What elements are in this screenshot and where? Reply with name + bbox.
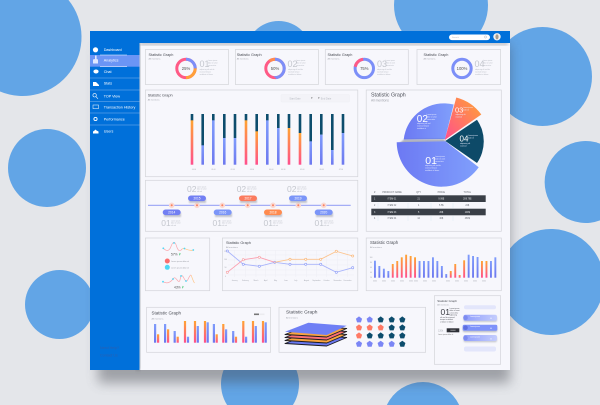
pie labels: Lorem ipsum bbox=[463, 106, 473, 109]
product table: # bbox=[374, 191, 376, 194]
blue series bbox=[226, 250, 354, 273]
month labels: August bbox=[304, 279, 310, 282]
donut card 4: 100% bbox=[457, 66, 468, 71]
donut card 3: Statistic Graph bbox=[328, 53, 352, 57]
pie labels: dolor sit amet bbox=[426, 116, 437, 118]
product table: ITEM 04 bbox=[388, 218, 397, 220]
donut card 1: Lorem ipsum bbox=[208, 60, 218, 62]
menu labels: TOP View bbox=[104, 94, 120, 98]
dashboard window bbox=[90, 31, 510, 370]
value badge bbox=[438, 328, 459, 336]
grouped bar card: All mentions bbox=[152, 318, 164, 320]
product table: TOTAL bbox=[464, 191, 472, 194]
time labels: 04:00 bbox=[269, 169, 273, 171]
product table: QTY bbox=[416, 191, 422, 194]
timeline captions: dolor sit amet bbox=[247, 188, 257, 191]
time labels: 01:00 bbox=[211, 169, 216, 171]
donut card 2: All mentions bbox=[237, 58, 250, 61]
window shadow bbox=[98, 45, 510, 383]
list card: elit sed do eiusmod bbox=[440, 316, 455, 319]
column labels: 0000 bbox=[382, 280, 386, 282]
time labels: 07:00 bbox=[339, 169, 343, 171]
layers and pictogram card: All mentions bbox=[286, 316, 299, 320]
timeline card bbox=[145, 180, 358, 231]
blue bar segments bbox=[201, 120, 344, 165]
timeline captions: dolor sit amet bbox=[171, 222, 181, 225]
y axis labels bbox=[370, 257, 372, 279]
date filter: End Date bbox=[321, 98, 332, 100]
y axis labels: 60 bbox=[370, 267, 372, 269]
menu labels: Dashboard bbox=[104, 48, 122, 52]
donut card 3: dolor sit amet bbox=[386, 62, 396, 64]
timeline captions: elit sed bbox=[247, 190, 252, 193]
time labels: 05:00 bbox=[300, 169, 304, 171]
menu labels: Chat bbox=[104, 70, 111, 74]
column labels bbox=[373, 280, 486, 282]
time labels: 03:00 bbox=[250, 169, 254, 171]
year pills: 2016 bbox=[219, 210, 226, 214]
product table: 480$ bbox=[465, 218, 471, 220]
date filter: Start Date bbox=[289, 98, 301, 100]
list card: tempor incididunt bbox=[440, 318, 453, 321]
timeline captions: elit sed bbox=[273, 224, 278, 227]
product table bbox=[371, 191, 486, 221]
pie labels: eiusmod tempor bbox=[417, 124, 430, 128]
pie labels: incididunt ut labore bbox=[425, 169, 439, 172]
year pills bbox=[163, 196, 333, 215]
layered stack bbox=[285, 323, 347, 346]
top bar bbox=[90, 31, 510, 43]
y axis labels: 20 bbox=[370, 277, 372, 279]
column chart card: All mentions bbox=[370, 246, 383, 249]
product table: 9.99$ bbox=[438, 199, 445, 201]
column labels: 0000 bbox=[473, 280, 477, 282]
time labels: 00:00 bbox=[192, 169, 196, 171]
y axis labels: 120 bbox=[224, 251, 227, 253]
pie labels: dolor sit bbox=[468, 136, 474, 140]
product table: PRODUCT NAME bbox=[382, 191, 402, 194]
grouped bar card bbox=[147, 307, 271, 352]
timeline numbers: 01 bbox=[264, 218, 273, 228]
pie labels: adipiscing elit sed bbox=[417, 122, 430, 125]
column labels: 0000 bbox=[373, 280, 377, 282]
y axis labels: 100 bbox=[224, 259, 227, 261]
donut card 2: 02 bbox=[288, 59, 298, 69]
timeline captions: elit sed bbox=[324, 224, 329, 227]
column labels: 0000 bbox=[446, 280, 450, 282]
pie slice 04 bbox=[445, 120, 484, 163]
column chart card: Statistic Graph bbox=[370, 240, 399, 245]
donut 25% bbox=[177, 59, 195, 78]
pie labels: adipiscing elit bbox=[460, 142, 471, 145]
column labels: 0000 bbox=[482, 280, 486, 282]
timeline numbers: 01 bbox=[314, 218, 324, 228]
timeline captions: dolor sit amet bbox=[197, 188, 207, 191]
month labels: January bbox=[232, 279, 238, 282]
dark bar segments bbox=[191, 114, 344, 150]
column labels: 0000 bbox=[423, 280, 427, 282]
timeline markers bbox=[169, 202, 327, 208]
pie labels: Lorem ipsum bbox=[426, 113, 437, 116]
column labels: 0000 bbox=[432, 280, 436, 282]
list card: Statistic Graph bbox=[437, 299, 457, 303]
column labels: 0000 bbox=[414, 280, 418, 282]
pie labels: 02 bbox=[417, 114, 428, 125]
donut card 2: consectetur bbox=[296, 64, 305, 67]
donut 50% bbox=[266, 59, 284, 78]
product table: 209.79$ bbox=[463, 199, 472, 201]
date filter bbox=[281, 94, 350, 102]
timeline numbers: 02 bbox=[237, 184, 246, 194]
year pills: 2015 bbox=[193, 196, 201, 200]
top bar shadow bbox=[140, 42, 508, 45]
pie labels: eiusmod bbox=[460, 146, 466, 148]
time labels bbox=[192, 169, 343, 171]
sparkline card bbox=[145, 238, 210, 291]
pie labels: 01 bbox=[425, 155, 437, 167]
timeline captions: Lorem ipsum bbox=[222, 220, 232, 222]
menu labels: Users bbox=[104, 130, 113, 134]
timeline captions: dolor sit amet bbox=[297, 188, 307, 191]
timeline captions: Lorem ipsum bbox=[273, 220, 283, 222]
help links: Need Help? bbox=[100, 346, 119, 350]
line chart card: All mentions bbox=[226, 246, 239, 249]
stacked bar chart card bbox=[145, 90, 358, 177]
timeline captions: Lorem ipsum bbox=[297, 186, 307, 188]
search box: Search bbox=[452, 36, 460, 39]
donut card 4: All mentions bbox=[424, 58, 436, 61]
pie labels: 03 bbox=[455, 106, 463, 115]
donut card 1: consectetur bbox=[208, 64, 217, 67]
month labels: May bbox=[274, 280, 277, 282]
pie labels: Lorem ipsum bbox=[435, 155, 445, 158]
year pills: 2019 bbox=[294, 196, 302, 200]
y axis labels: 80 bbox=[370, 262, 372, 264]
menu labels: Stats bbox=[104, 82, 112, 86]
orange columns bbox=[392, 255, 487, 278]
menu labels: Performance bbox=[104, 117, 125, 121]
month labels: November bbox=[334, 279, 342, 282]
timeline captions: elit sed bbox=[197, 190, 202, 193]
donut card 4: incididunt ut labore bbox=[475, 73, 488, 76]
year pills: 2018 bbox=[269, 210, 277, 214]
donut card 2: eiusmod tempor bbox=[288, 70, 300, 74]
legend: Lorem ipsum dolor sit bbox=[171, 260, 190, 263]
product table: 4 bbox=[374, 218, 376, 220]
menu icons bbox=[93, 47, 99, 134]
product table: 40$ bbox=[439, 218, 444, 220]
bottom sparkline bbox=[162, 275, 194, 283]
list pills bbox=[463, 305, 497, 352]
donut card 1 bbox=[145, 50, 228, 84]
list card: Lorem ipsum bbox=[450, 307, 460, 310]
donut card 4: dolor sit amet bbox=[483, 62, 493, 64]
value badge: 120k bbox=[438, 330, 444, 333]
list card: dolor sit amet bbox=[450, 309, 460, 312]
donut card 4: Statistic Graph bbox=[424, 53, 448, 57]
pie slice 01 bbox=[397, 141, 479, 187]
y axis labels: 50 bbox=[225, 267, 226, 269]
donut card 4 bbox=[417, 50, 501, 84]
y axis labels bbox=[224, 251, 227, 278]
active menu highlight bbox=[90, 55, 140, 67]
help links: Contact Us bbox=[100, 354, 118, 358]
pie and table card: All mentions bbox=[371, 99, 389, 103]
pie labels: consectetur bbox=[426, 118, 436, 121]
month labels: December bbox=[344, 279, 352, 282]
time labels: 06:00 bbox=[320, 169, 324, 171]
product table: ITEM 02 bbox=[388, 205, 397, 207]
orange bars bbox=[157, 321, 264, 343]
timeline axis bbox=[148, 205, 351, 206]
product table: 12 bbox=[417, 218, 421, 220]
pie and table card bbox=[366, 90, 501, 231]
timeline captions: Lorem ipsum bbox=[171, 220, 181, 222]
pie labels: eiusmod tempor bbox=[425, 166, 438, 170]
pie labels: consectetur bbox=[435, 160, 444, 163]
pie labels bbox=[417, 106, 478, 172]
y axis labels: 40 bbox=[370, 272, 372, 274]
donut card 2: Lorem ipsum bbox=[296, 60, 306, 62]
timeline captions: dolor sit amet bbox=[273, 222, 283, 225]
pie labels: incididunt ut bbox=[417, 127, 427, 130]
menu labels bbox=[104, 48, 135, 134]
timeline captions: elit sed bbox=[171, 224, 176, 227]
pie labels: dolor sit amet bbox=[435, 158, 446, 160]
legend: Lorem ipsum dolor sit bbox=[171, 266, 190, 269]
donut card 3: adipiscing elit sed do bbox=[377, 68, 392, 71]
time labels: 02:00 bbox=[231, 169, 235, 171]
donut card 1: 25% bbox=[182, 66, 190, 71]
time labels: 04:30 bbox=[281, 169, 285, 171]
donut card 3: incididunt ut labore bbox=[377, 73, 390, 76]
y axis labels: 100 bbox=[370, 257, 372, 259]
pie slice 03 bbox=[445, 98, 481, 140]
product table: 100$ bbox=[465, 212, 471, 214]
donut card 3: All mentions bbox=[328, 58, 340, 61]
donut card 2: Statistic Graph bbox=[237, 53, 262, 57]
timeline captions bbox=[171, 186, 334, 227]
pie slice 01 shadow bbox=[398, 139, 446, 144]
donut card 2: adipiscing elit sed do bbox=[288, 68, 303, 71]
donut card 3: 75% bbox=[360, 66, 369, 71]
timeline captions: elit sed bbox=[222, 224, 227, 227]
product table: 3 bbox=[374, 212, 376, 214]
donut card 4: adipiscing elit sed do bbox=[475, 68, 490, 71]
orange bar segments bbox=[191, 120, 301, 165]
product table: 2 bbox=[374, 205, 376, 207]
stacked bar chart card: All mentions bbox=[148, 98, 161, 102]
search box bbox=[449, 34, 490, 40]
donut card 3: consectetur bbox=[386, 64, 394, 67]
sidebar shadow bbox=[136, 43, 140, 370]
bottom percentage: 43% bbox=[174, 286, 181, 290]
list card: ut labore et dolore bbox=[440, 320, 454, 323]
blue bars bbox=[154, 322, 267, 343]
column labels: 0000 bbox=[391, 280, 395, 282]
pie labels: dolor sit bbox=[463, 108, 469, 112]
line chart card: Statistic Graph bbox=[226, 241, 251, 245]
donut card 3: 03 bbox=[377, 59, 387, 69]
donut card 1: All mentions bbox=[148, 58, 161, 61]
top percentage: 57% bbox=[171, 253, 178, 257]
timeline captions: dolor sit amet bbox=[222, 222, 232, 225]
list pills: 00 bbox=[490, 338, 492, 340]
donut card 1: incididunt ut labore bbox=[200, 73, 213, 76]
timeline captions: dolor sit amet bbox=[324, 222, 334, 225]
timeline captions: Lorem ipsum bbox=[197, 186, 207, 188]
month labels: October bbox=[323, 279, 330, 282]
list pills: Lorem ipsum bbox=[470, 325, 480, 328]
column labels: 0000 bbox=[409, 280, 413, 282]
value badge: 00000 bbox=[450, 330, 457, 332]
pie labels: adipiscing elit sed do bbox=[425, 164, 441, 167]
legend toggle bbox=[254, 314, 264, 315]
donut card 2: dolor sit amet bbox=[296, 62, 306, 64]
timeline numbers: 01 bbox=[161, 218, 171, 228]
list pills: Lorem ipsum bbox=[470, 315, 480, 318]
menu labels: Analytics bbox=[104, 59, 119, 63]
month labels: September bbox=[312, 279, 321, 282]
donut card 1: adipiscing elit sed do bbox=[200, 68, 214, 71]
legend bbox=[165, 258, 190, 270]
layers and pictogram card bbox=[279, 307, 426, 352]
column labels: 0000 bbox=[464, 280, 468, 282]
pie labels: eiusmod bbox=[456, 116, 462, 118]
donut card 1: eiusmod tempor bbox=[200, 70, 211, 74]
donut card 3 bbox=[325, 50, 408, 84]
top sparkline bbox=[162, 242, 194, 251]
help links bbox=[100, 346, 119, 358]
product table: 4 bbox=[418, 205, 420, 207]
column chart card bbox=[366, 238, 501, 291]
product table: 20$ bbox=[439, 212, 444, 214]
month labels bbox=[232, 279, 352, 282]
product table: 22$ bbox=[465, 205, 470, 207]
list card: adipiscing bbox=[450, 315, 457, 317]
product table: ITEM 03 bbox=[388, 212, 397, 214]
timeline numbers bbox=[161, 184, 324, 228]
list card: All mentions bbox=[437, 304, 450, 306]
list pills: 00 bbox=[490, 318, 492, 320]
donut card 1: 01 bbox=[200, 59, 210, 69]
donut 100% bbox=[453, 59, 471, 78]
month labels: February bbox=[242, 279, 249, 282]
donut card 4: Lorem ipsum bbox=[483, 60, 493, 62]
year pills: 2020 bbox=[320, 210, 327, 214]
column labels: 0000 bbox=[455, 280, 459, 282]
list pills: 00 bbox=[490, 328, 492, 330]
year pills: 2017 bbox=[244, 196, 252, 200]
product table: 1 bbox=[374, 199, 376, 201]
pie labels: 04 bbox=[460, 134, 469, 144]
avatar bbox=[493, 33, 501, 40]
pie labels: Lorem ipsum bbox=[468, 134, 478, 137]
month labels: July bbox=[294, 280, 297, 282]
donut card 4: 04 bbox=[474, 59, 485, 69]
product table: ITEM 01 bbox=[388, 199, 397, 201]
donut card 1: dolor sit amet bbox=[208, 62, 218, 64]
pink and orange series bbox=[226, 250, 354, 273]
product table: 5 bbox=[418, 212, 420, 214]
donut card 2: 50% bbox=[271, 66, 279, 71]
month labels: March bbox=[254, 279, 258, 282]
donut card 4: eiusmod tempor bbox=[475, 70, 487, 74]
pie labels: adipiscing elit bbox=[456, 113, 466, 116]
month labels: June bbox=[284, 280, 288, 282]
product table: 21 bbox=[417, 199, 421, 201]
value badge: Lorem ipsum dolor sit bbox=[438, 333, 454, 336]
product table: 5.5$ bbox=[439, 205, 444, 207]
donut card 1: Statistic Graph bbox=[148, 53, 173, 57]
list card: consectetur bbox=[450, 311, 459, 314]
list card bbox=[434, 296, 501, 364]
pie and table card: Statistic Graph bbox=[371, 93, 406, 99]
pie slice 02 bbox=[404, 103, 454, 140]
sidebar bbox=[90, 43, 140, 370]
year pill shadows bbox=[164, 198, 333, 217]
timeline numbers: 01 bbox=[212, 218, 222, 228]
y axis labels: 0 bbox=[225, 276, 226, 278]
donut card 4: consectetur bbox=[483, 64, 492, 67]
layers and pictogram card: Statistic Graph bbox=[286, 310, 318, 316]
timeline captions: Lorem ipsum bbox=[247, 186, 257, 188]
donut card 2: incididunt ut labore bbox=[288, 73, 301, 76]
product table: PRICE bbox=[438, 191, 445, 194]
line chart card bbox=[222, 238, 358, 291]
donut card 3: eiusmod tempor bbox=[377, 70, 389, 74]
stacked bar chart card: Statistic Graph bbox=[148, 94, 173, 98]
donut card 3: Lorem ipsum bbox=[386, 60, 395, 62]
list pills: Lorem ipsum bbox=[470, 335, 480, 338]
grouped bar card: Statistic Graph bbox=[152, 311, 182, 316]
donut card 2 bbox=[235, 50, 318, 84]
timeline numbers: 02 bbox=[287, 184, 297, 194]
pentagon pictogram bbox=[356, 316, 405, 347]
blue columns bbox=[374, 255, 496, 278]
timeline captions: elit sed bbox=[297, 190, 302, 193]
timeline numbers: 02 bbox=[187, 184, 197, 194]
timeline captions: Lorem ipsum bbox=[324, 220, 334, 222]
list number: 01 bbox=[440, 307, 450, 317]
menu labels: Transaction History bbox=[104, 106, 135, 110]
month labels: April bbox=[264, 279, 268, 282]
year pills: 2014 bbox=[168, 210, 175, 214]
donut 75% bbox=[355, 59, 374, 78]
column labels: 0000 bbox=[400, 280, 404, 282]
